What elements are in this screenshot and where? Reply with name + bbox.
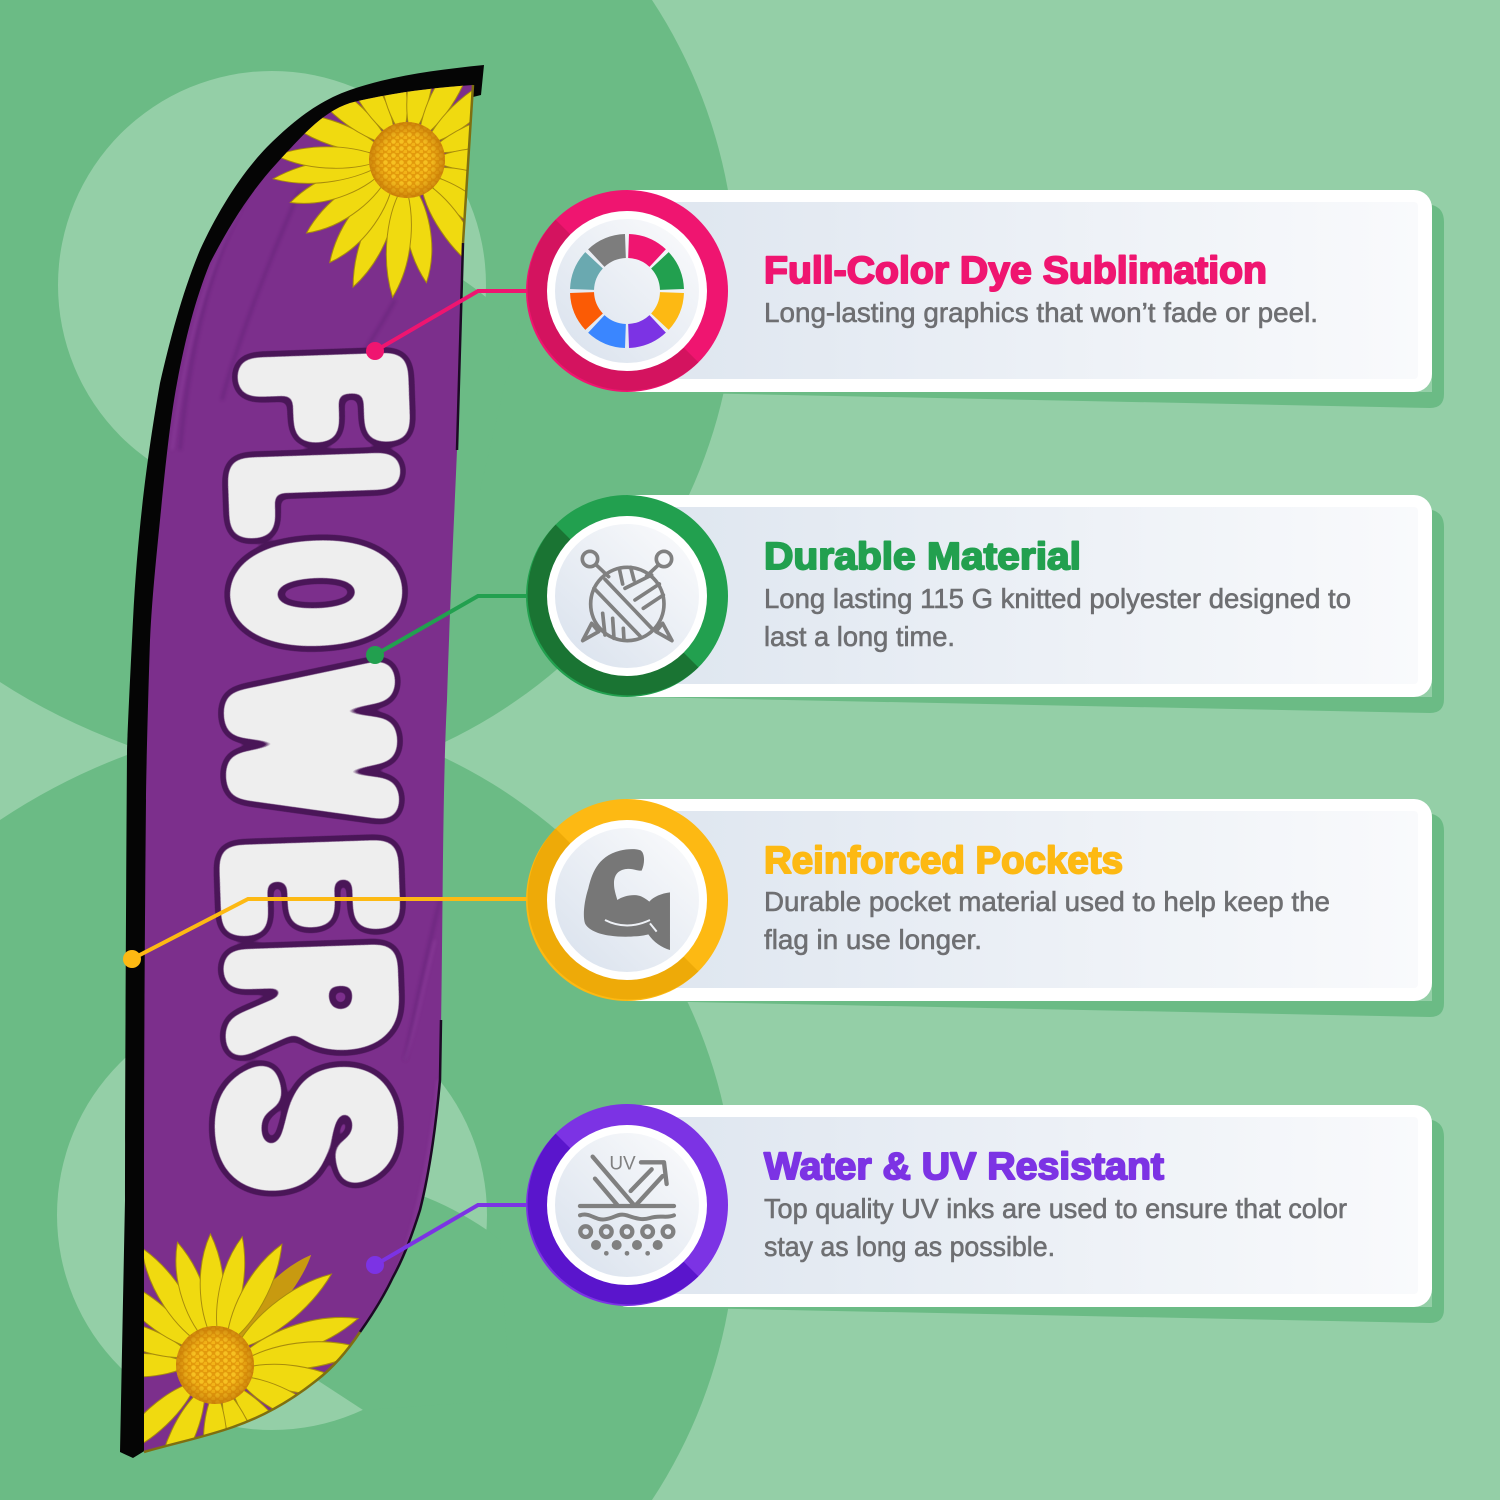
panel: Full-Color Dye Sublimation [610,190,1444,408]
connector: purple [366,1205,530,1274]
badge: yarn [526,495,728,697]
icon: color wheel [563,227,691,355]
badge: UV [526,1104,728,1306]
flag fabric [144,85,472,1451]
badge: color wheel [526,190,728,392]
flag wordmark: FLOWERS: W [186,668,437,818]
flag right edge seam [360,243,463,1332]
heading: Durable Material [764,536,1081,578]
icon: yarn ball and needles [582,551,672,641]
description: Long-lasting graphics that won’t fade or peel. [764,297,1318,328]
heading: Water & UV Resistant [764,1146,1164,1188]
flag [120,65,484,1458]
description: Top quality UV inks are used to ensure that color [764,1193,1347,1224]
description: Durable pocket material used to help keep the [764,886,1330,917]
heading: Reinforced Pockets [764,840,1123,882]
description: Long lasting 115 G knitted polyester designed to [764,583,1351,614]
description line 2: flag in use longer. [764,924,982,955]
flag wordmark: FLOWERS: R [185,943,438,1053]
flag pole sleeve [120,65,484,1458]
flag wordmark: FLOWERS: E [180,839,439,934]
icon: flexed arm [584,849,670,950]
connector: yellow [123,899,530,968]
flag wordmark: FLOWERS: S [177,1063,437,1191]
flag wordmark: FLOWERS: O [194,541,437,646]
flag yellow seam [144,85,473,1452]
icon: UV reflection [580,1154,674,1256]
description line 2: last a long time. [764,621,955,652]
panel: Water & UV Resistant [610,1105,1444,1323]
flag wordmark: FLOWERS: L [191,453,441,535]
heading: Full-Color Dye Sublimation [764,250,1267,292]
icon: UV reflection: UV [609,1154,636,1175]
connector: green [366,596,530,664]
flag wordmark: FLOWERS [177,352,447,1191]
panel: Reinforced Pockets [610,799,1444,1017]
connector: pink [366,291,530,360]
top sunflower [272,86,472,298]
bottom sunflower [144,1233,360,1445]
flag wordmark: FLOWERS: F [200,352,447,443]
description line 2: stay as long as possible. [764,1231,1055,1262]
badge: muscle [526,799,728,1001]
panel: Durable Material [610,495,1444,713]
